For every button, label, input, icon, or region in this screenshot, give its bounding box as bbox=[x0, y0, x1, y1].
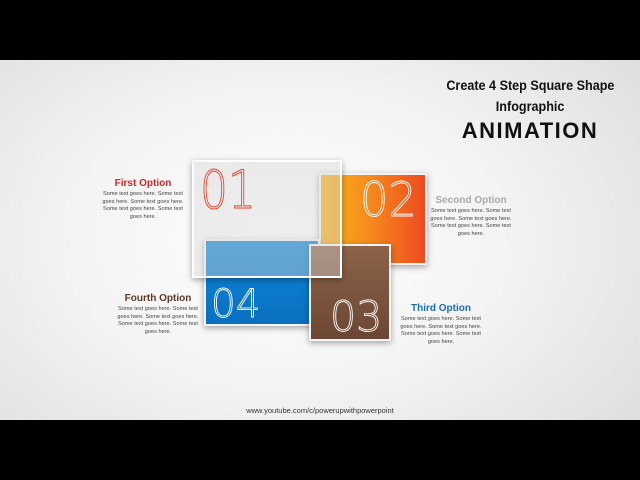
square 3 brown bbox=[309, 244, 391, 341]
first option bbox=[102, 178, 184, 220]
title: Infographic bbox=[496, 98, 564, 114]
fourth option: Some text goes here. Some text goes here. Some text goes here. Some text goes here. Some text goes here. bbox=[117, 306, 199, 334]
square 2 orange bbox=[319, 173, 427, 265]
first option: Some text goes here. Some text goes here. Some text goes here. Some text goes here. Some text goes here. bbox=[102, 191, 184, 220]
fourth option: Fourth Option bbox=[125, 293, 191, 304]
title: ANIMATION bbox=[462, 118, 598, 143]
third option bbox=[400, 303, 482, 344]
title bbox=[446, 77, 614, 143]
third option: Some text goes here. Some text goes here. Some text goes here. Some text goes here. Some text goes here. bbox=[400, 316, 482, 344]
second option: Second Option bbox=[435, 195, 507, 206]
fourth option bbox=[117, 293, 199, 334]
second option: Some text goes here. Some text goes here. Some text goes here. Some text goes here. Some text goes here. bbox=[430, 208, 512, 236]
footer url: www.youtube.com/c/powerupwithpowerpoint bbox=[246, 406, 394, 415]
third option: Third Option bbox=[411, 303, 471, 314]
first option: First Option bbox=[115, 178, 171, 189]
title: Create 4 Step Square Shape bbox=[446, 77, 614, 93]
second option bbox=[430, 195, 512, 236]
square 4 blue bbox=[204, 239, 320, 326]
square 1 translucent bbox=[192, 160, 342, 278]
